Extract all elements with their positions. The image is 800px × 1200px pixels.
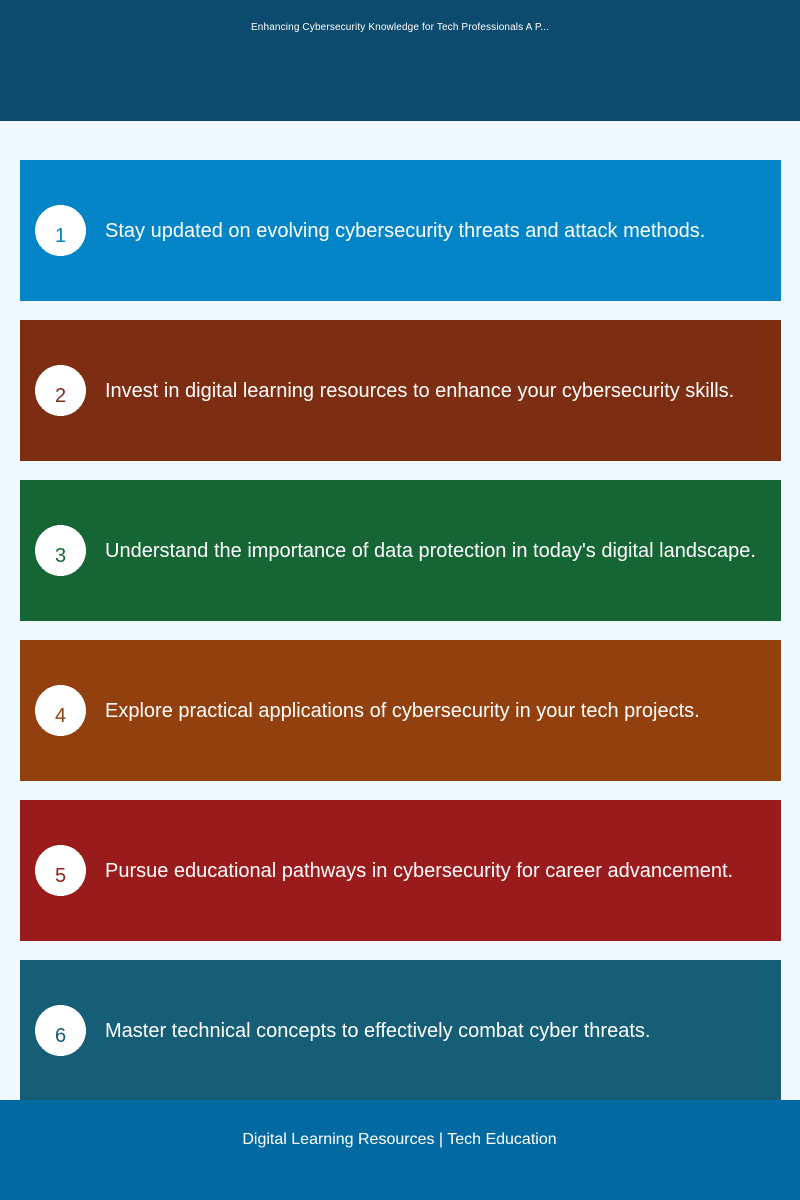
title: Enhancing Cybersecurity Knowledge for Tech Professionals A P... (251, 22, 549, 33)
panel: point 2 (20, 320, 781, 461)
panel: point 1 (20, 160, 781, 301)
text: point 6: Master technical concepts to effectively combat cyber threats. (105, 1020, 650, 1042)
text: point 3: Understand the importance of data protection in today's digital landscape. (105, 540, 756, 562)
number badge 5: 5 (55, 865, 66, 887)
panel: point 6 (20, 960, 781, 1101)
text: point 2: Invest in digital learning resources to enhance your cybersecurity skills. (105, 380, 734, 402)
panel: point 4 (20, 640, 781, 781)
number badge 1 (35, 205, 86, 256)
header banner (0, 0, 800, 121)
number badge 6 (35, 1005, 86, 1056)
number badge 2 (35, 365, 86, 416)
number badge 4 (35, 685, 86, 736)
panel: point 5 (20, 800, 781, 941)
text: point 4: Explore practical applications of cybersecurity in your tech projects. (105, 700, 700, 722)
number badge 3: 3 (55, 545, 66, 567)
number badge 1: 1 (55, 225, 66, 247)
footer (0, 1100, 800, 1200)
text: point 1: Stay updated on evolving cybersecurity threats and attack methods. (105, 220, 705, 242)
text: point 5: Pursue educational pathways in cybersecurity for career advancement. (105, 860, 733, 882)
number badge 6: 6 (55, 1025, 66, 1047)
footer text: Digital Learning Resources | Tech Education (242, 1131, 557, 1148)
number badge 3 (35, 525, 86, 576)
number badge 5 (35, 845, 86, 896)
number badge 2: 2 (55, 385, 66, 407)
panel: point 3 (20, 480, 781, 621)
number badge 4: 4 (55, 705, 66, 727)
